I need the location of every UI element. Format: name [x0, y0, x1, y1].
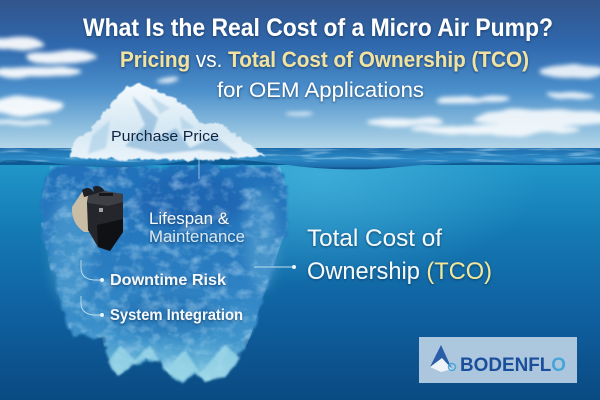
connector: downtime risk — [81, 260, 104, 282]
heading: main title: What Is the Real Cost of a Micro Air Pump? — [83, 14, 553, 42]
label: downtime risk: Downtime Risk — [110, 272, 226, 289]
sky background — [0, 0, 600, 150]
iceberg underwater — [41, 166, 288, 381]
sea surface band — [0, 148, 600, 169]
logo: Bodenflo: BODENFLO — [460, 355, 566, 376]
label: purchase price: Purchase Price — [111, 128, 219, 145]
iceberg above water — [70, 84, 266, 160]
clouds — [0, 37, 600, 135]
label: lifespan and maintenance: Maintenance — [149, 228, 245, 246]
heading: for OEM applications: for OEM Applications — [217, 79, 424, 102]
underwater background — [0, 165, 600, 400]
callout: total cost of ownership: Ownership (TCO) — [307, 258, 493, 285]
label: system integration: System Integration — [110, 307, 243, 324]
connector: purchase price — [198, 150, 200, 179]
heading: subtitle: Pricing vs. Total Cost of Ownership (TCO) — [120, 47, 529, 72]
logo: Bodenflo — [419, 337, 577, 383]
connector: total cost of ownership — [254, 265, 296, 269]
connector: system integration — [81, 296, 104, 317]
icon: micro air pump — [72, 186, 123, 251]
callout: total cost of ownership: Total Cost of — [307, 225, 442, 252]
label: lifespan and maintenance: Lifespan & — [149, 210, 229, 228]
